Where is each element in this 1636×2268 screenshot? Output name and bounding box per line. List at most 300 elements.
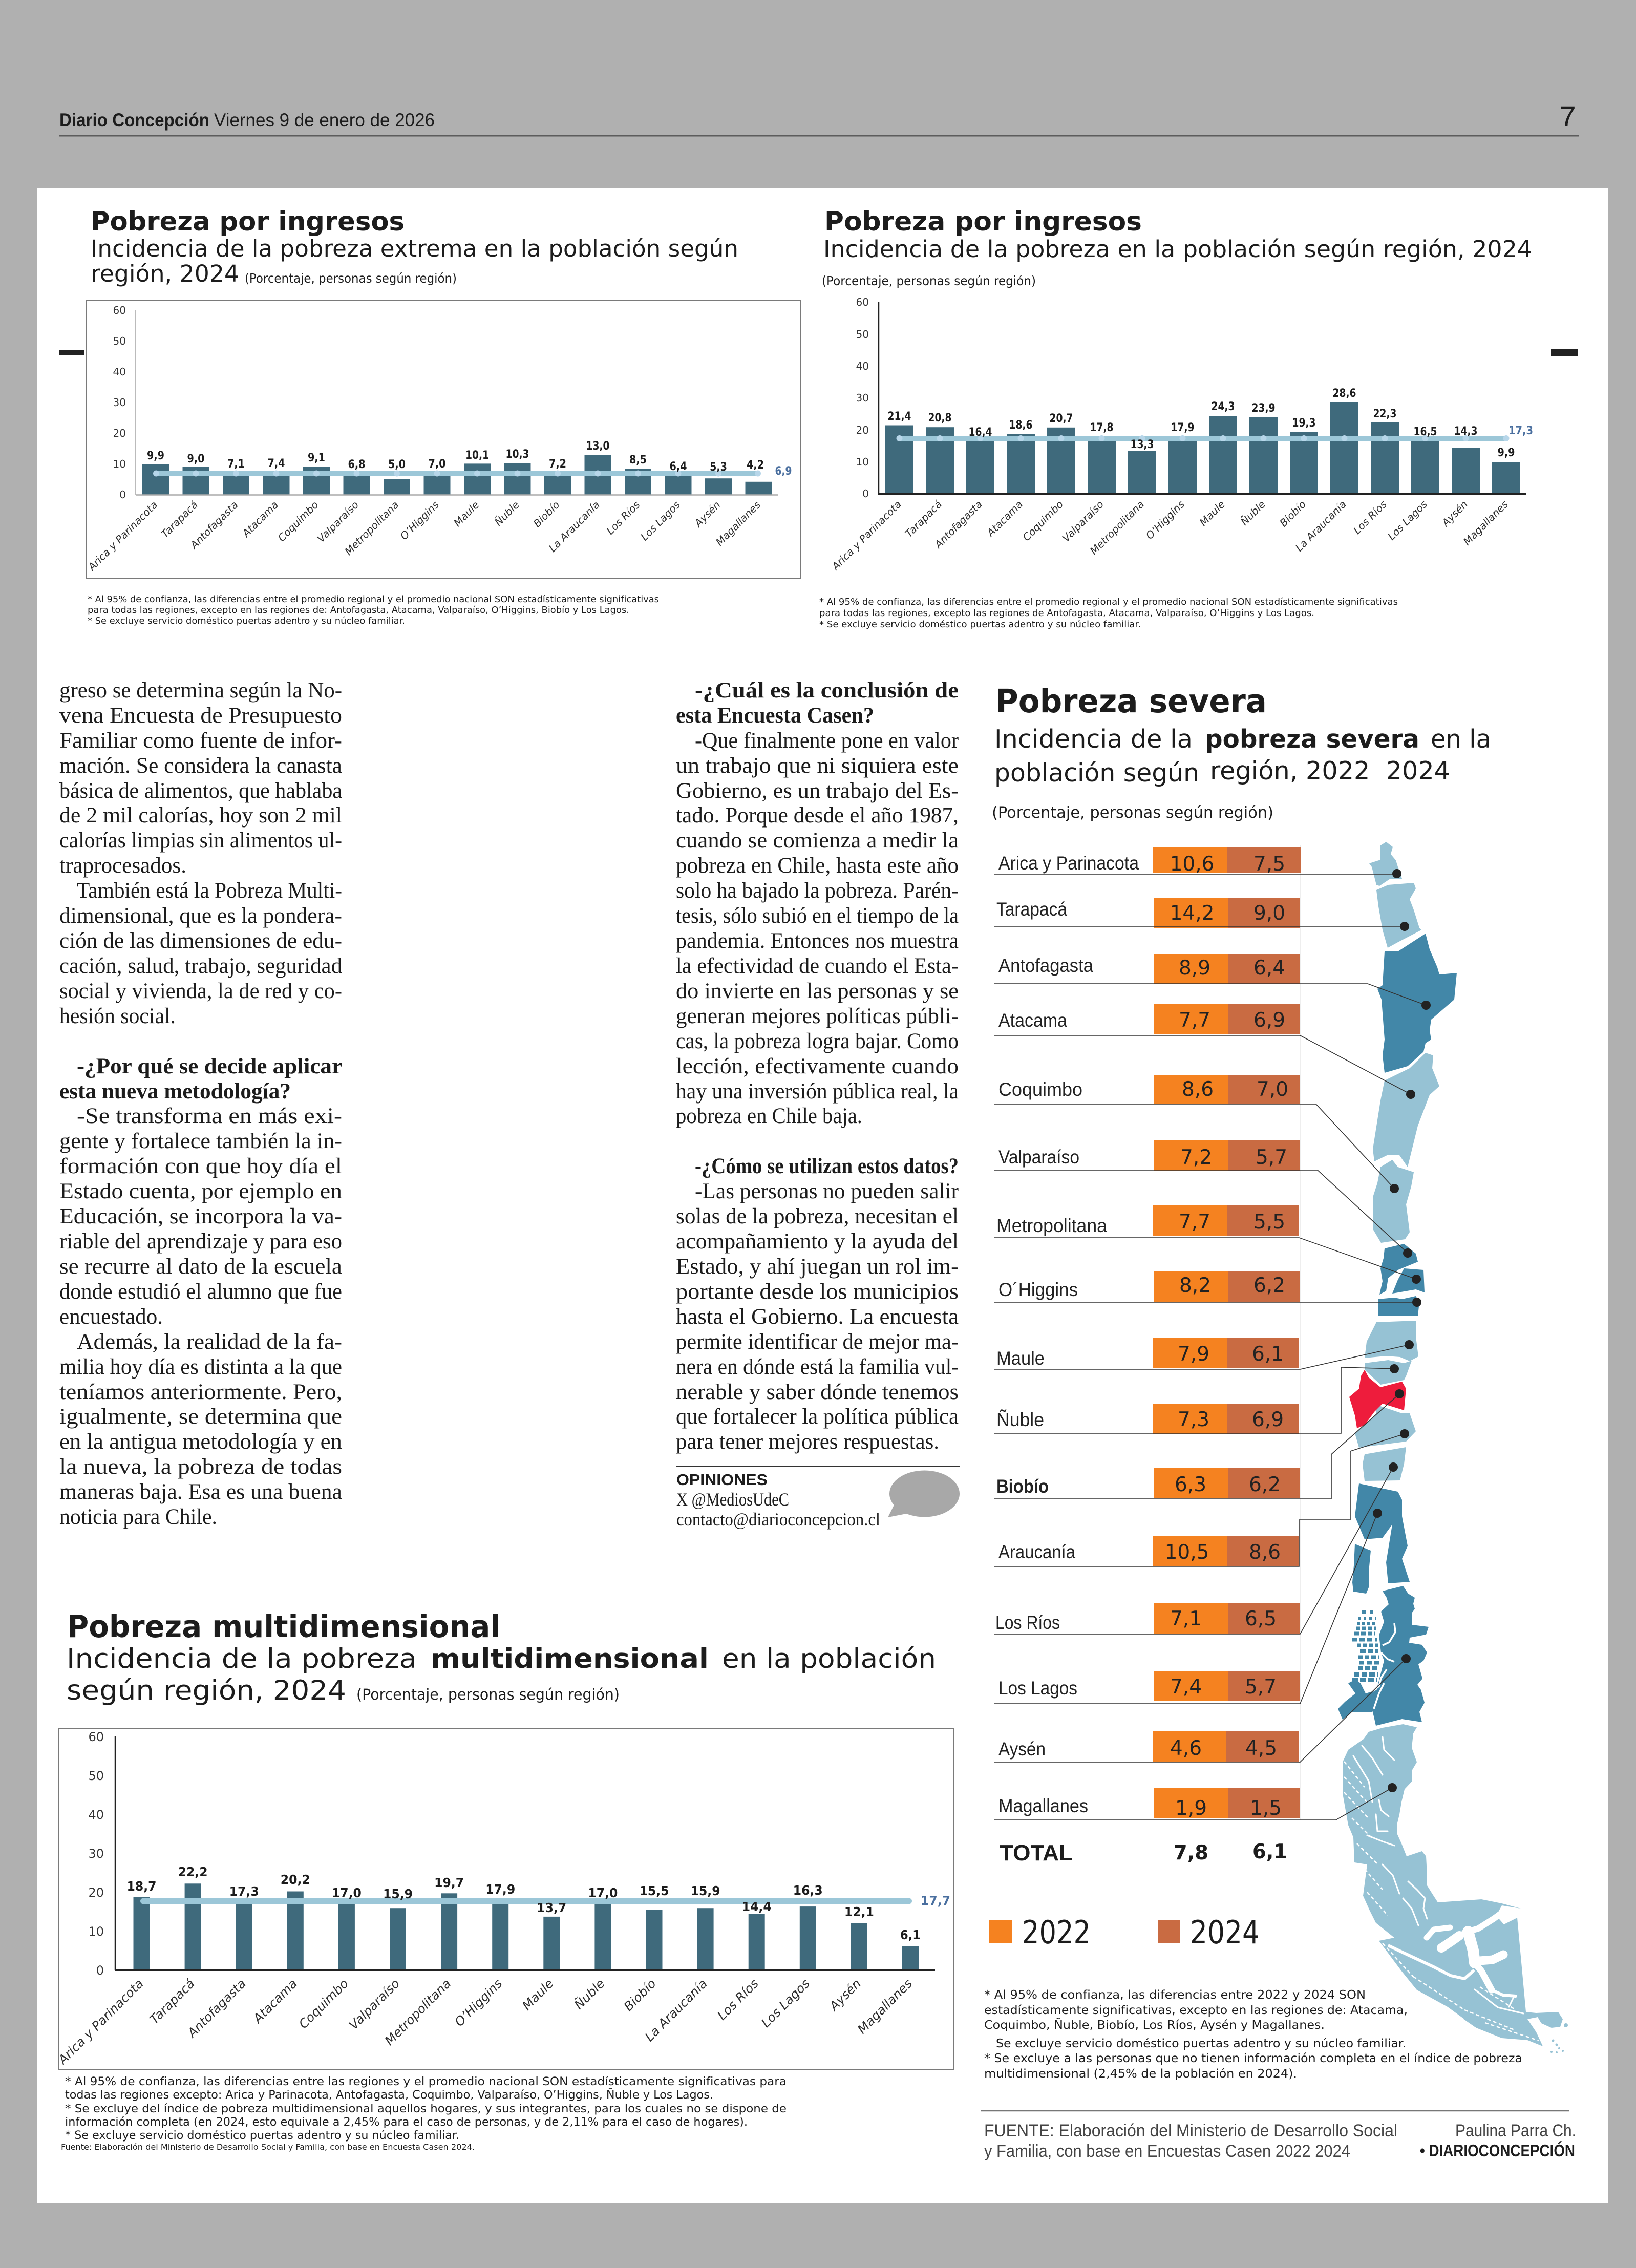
- x axis: [115, 1969, 935, 1971]
- text column left: Educación, se incorpora la va-: [59, 1204, 342, 1228]
- region labels: Ñuble: [1238, 498, 1268, 528]
- connector lines: [994, 874, 1426, 1820]
- region labels: La Araucanía: [1293, 498, 1349, 554]
- text column right: lección, efectivamente cuando: [676, 1054, 959, 1078]
- value labels: 17,3: [229, 1884, 259, 1899]
- row: Antofagasta: Antofagasta: [998, 955, 1093, 976]
- region labels: La Araucanía: [642, 1976, 710, 2044]
- row: Coquimbo: 8,6: [1182, 1078, 1214, 1101]
- footnotes: Se excluye servicio doméstico puertas adentro y su núcleo familiar.: [996, 2037, 1406, 2050]
- national average line: 17,7: [921, 1893, 950, 1908]
- text column left: [59, 679, 342, 1529]
- row: O´Higgins: 6,2: [1253, 1274, 1285, 1297]
- row: Arica y Parinacota: 10,6: [1170, 853, 1214, 876]
- value labels: 10,3: [506, 448, 529, 461]
- text column right: un trabajo que ni siquiera este: [676, 754, 959, 778]
- value labels: 7,0: [428, 458, 445, 471]
- heading: región, 2022 2024: [1210, 756, 1450, 786]
- region labels: Coquimbo: [1020, 498, 1066, 543]
- map: Aysén archipelago: [1352, 1612, 1380, 1680]
- region labels: Ñuble: [571, 1976, 608, 2012]
- value labels: 15,9: [383, 1887, 413, 1901]
- region labels: Tarapacá: [903, 498, 944, 540]
- row: Ñuble: 7,3: [1178, 1408, 1209, 1431]
- region labels: Aysén: [1439, 498, 1470, 529]
- value labels: 28,6: [1332, 387, 1356, 400]
- text column right: -¿Cómo se utilizan estos datos?: [695, 1154, 959, 1178]
- row: total: [1000, 1840, 1287, 1866]
- row: Atacama: [998, 1004, 1300, 1034]
- heading: [822, 206, 1532, 288]
- row: Tarapacá: 9,0: [1253, 902, 1285, 925]
- value labels: 20,2: [281, 1872, 310, 1887]
- footnotes: [984, 1988, 1522, 2081]
- heading: (Porcentaje, personas según región): [356, 1686, 620, 1703]
- row: Biobío: 6,2: [1249, 1473, 1281, 1496]
- value labels: 14,3: [1454, 425, 1478, 438]
- value labels: [147, 440, 764, 474]
- region labels: Atacama: [249, 1976, 300, 2027]
- region labels: O’Higgins: [1143, 498, 1187, 542]
- text column left: se recurre al dato de la escuela: [59, 1255, 342, 1279]
- row: Valparaíso: [998, 1140, 1300, 1171]
- row: Los Lagos: [998, 1671, 1300, 1701]
- map: Magallanes speckled islands: [1344, 1762, 1539, 2041]
- heading: [91, 206, 738, 287]
- region labels: Maule: [1197, 498, 1227, 528]
- text column right: -¿Cuál es la conclusión de: [695, 679, 959, 703]
- footnotes: * Al 95% de confianza, las diferencias entre el promedio regional y el promedio nacional SON estadísticamente significativas: [819, 597, 1398, 607]
- heading: pobreza severa: [1205, 725, 1419, 754]
- text column right: hay una inversión pública real, la: [676, 1079, 959, 1104]
- text column right: nera en dónde está la familia vul-: [676, 1355, 959, 1379]
- row: Arica y Parinacota: Arica y Parinacota: [998, 853, 1139, 874]
- y axis: 60: [856, 296, 869, 308]
- y axis: 40: [856, 360, 869, 372]
- heading: Incidencia de la pobreza en la población según región, 2024: [823, 236, 1532, 263]
- footnotes: * Se excluye servicio doméstico puertas adentro y su núcleo familiar.: [65, 2129, 459, 2142]
- text column left: -¿Por qué se decide aplicar: [77, 1054, 342, 1078]
- footnotes: para todas las regiones, excepto las regiones de Antofagasta, Atacama, Valparaíso, O’Higgins y Los Lagos.: [819, 608, 1314, 619]
- y axis: [113, 304, 136, 501]
- row: Arica y Parinacota: 7,5: [1253, 853, 1285, 876]
- row: Metropolitana: Metropolitana: [996, 1215, 1107, 1236]
- text column right: -Las personas no pueden salir: [695, 1179, 959, 1203]
- region labels: Tarapacá: [159, 499, 200, 540]
- text column right: portante desde los municipios: [676, 1280, 959, 1304]
- row: Los Lagos: Los Lagos: [998, 1678, 1077, 1699]
- value labels: 8,5: [629, 454, 647, 467]
- text column right: acompañamiento y la ayuda del: [676, 1230, 959, 1254]
- heading: Incidencia de la: [994, 725, 1193, 754]
- region labels: Metropolitana: [1088, 498, 1146, 557]
- heading: según región, 2024: [67, 1675, 346, 1706]
- text column right: do invierte en las personas y se: [676, 979, 959, 1003]
- row: Ñuble: Ñuble: [996, 1409, 1044, 1430]
- text column right: hasta el Gobierno. La encuesta: [676, 1305, 959, 1329]
- row: Tarapacá: 14,2: [1170, 902, 1214, 925]
- y axis: 30: [856, 392, 869, 404]
- text column left: básica de alimentos, que hablaba: [59, 779, 342, 803]
- region labels: Valparaíso: [346, 1976, 402, 2032]
- bars: [885, 402, 1520, 494]
- y axis: 10: [113, 458, 126, 470]
- value labels: 15,9: [691, 1883, 720, 1898]
- value labels: 16,3: [793, 1883, 823, 1898]
- panel: extreme poverty chart: [85, 206, 801, 626]
- region labels: Arica y Parinacota: [85, 499, 160, 574]
- text column right: para tener mejores respuestas.: [676, 1430, 939, 1454]
- row: total: 7,8: [1174, 1841, 1208, 1864]
- text column left: calorías limpias sin alimentos ul-: [59, 829, 342, 853]
- region labels: Magallanes: [713, 499, 763, 548]
- text column right: [676, 679, 959, 1454]
- text column left: formación con que hoy día el: [59, 1154, 342, 1178]
- icon: speech bubble: [888, 1471, 960, 1517]
- region labels: Arica y Parinacota: [54, 1976, 146, 2068]
- text column right: pandemia. Entonces nos muestra: [676, 929, 959, 953]
- region labels: [828, 498, 1511, 573]
- footnotes: multidimensional (2,45% de la población en 2024).: [984, 2067, 1297, 2081]
- row: Los Lagos: 5,7: [1245, 1676, 1277, 1699]
- source and credits: y Familia, con base en Encuestas Casen 2022 2024: [984, 2142, 1350, 2161]
- map: Magallanes mainland: [1343, 1724, 1563, 2046]
- heading: (Porcentaje, personas según región): [245, 271, 457, 286]
- row: Los Ríos: Los Ríos: [995, 1612, 1060, 1633]
- row: Coquimbo: [998, 1075, 1300, 1104]
- chart frame: [86, 300, 801, 579]
- row: Valparaíso: 5,7: [1256, 1146, 1287, 1169]
- region labels: Antofagasta: [184, 1976, 249, 2041]
- row: O´Higgins: O´Higgins: [998, 1279, 1078, 1300]
- text column right: nerable y saber dónde tenemos: [676, 1380, 959, 1404]
- heading: en la: [1431, 725, 1491, 754]
- value labels: 9,9: [1497, 447, 1515, 459]
- map: Aysén fjords: [1372, 1623, 1395, 1709]
- opinions box: OPINIONES: [676, 1471, 768, 1489]
- footnotes: * Se excluye del índice de pobreza multidimensional aquellos hogares, y sus integrantes, para los cuales no se dispone de: [65, 2103, 787, 2115]
- footnotes: [61, 2075, 787, 2152]
- row: Magallanes: [998, 1788, 1300, 1820]
- y axis: 60: [113, 304, 126, 316]
- panel: income poverty chart: [819, 206, 1533, 630]
- text column left: social y vivienda, la de red y co-: [59, 979, 342, 1003]
- heading: región, 2024: [91, 260, 239, 287]
- text column left: esta nueva metodología?: [59, 1079, 291, 1104]
- row: Atacama: 7,7: [1179, 1009, 1210, 1032]
- region labels: Magallanes: [855, 1976, 915, 2037]
- value labels: 17,0: [588, 1885, 618, 1900]
- text column right: cas, la pobreza logra bajar. Como: [676, 1029, 959, 1053]
- region labels: Biobío: [531, 499, 562, 529]
- value labels: 19,3: [1292, 417, 1316, 430]
- heading: población según: [994, 758, 1199, 788]
- map: light regions: [1355, 842, 1439, 1481]
- heading: [67, 1609, 936, 1706]
- y axis: 10: [856, 456, 869, 468]
- heading: [992, 683, 1491, 822]
- value labels: 6,1: [900, 1927, 921, 1942]
- row: Los Ríos: [995, 1603, 1300, 1634]
- row: Magallanes: Magallanes: [998, 1795, 1088, 1816]
- value labels: 21,4: [888, 410, 911, 423]
- region labels: Atacama: [239, 499, 281, 540]
- y axis: [88, 1730, 115, 1978]
- value labels: 24,3: [1212, 400, 1235, 413]
- value labels: 12,1: [844, 1904, 874, 1919]
- text column left: maneras baja. Esa es una buena: [59, 1480, 342, 1504]
- footnotes: * Se excluye servicio doméstico puertas adentro y su núcleo familiar.: [88, 616, 405, 626]
- text column left: milia hoy día es distinta a la que: [59, 1355, 342, 1379]
- footnotes: Fuente: Elaboración del Ministerio de Desarrollo Social y Familia, con base en Encuesta Casen 2024.: [61, 2142, 475, 2152]
- footnotes: * Se excluye a las personas que no tienen información completa en el índice de pobreza: [984, 2052, 1522, 2065]
- row: Valparaíso: 7,2: [1180, 1146, 1212, 1169]
- text column left: También está la Pobreza Multi-: [77, 879, 342, 903]
- y axis: 0: [96, 1963, 104, 1978]
- map: Magallanes straits and fjords: [1353, 1737, 1523, 2013]
- y axis: 60: [88, 1730, 104, 1744]
- registration mark left: [59, 350, 84, 355]
- source and credits: [981, 2111, 1576, 2161]
- row: Ñuble: 6,9: [1252, 1408, 1284, 1431]
- row: Valparaíso: Valparaíso: [998, 1147, 1079, 1168]
- row: Aysén: [998, 1731, 1299, 1762]
- row: Biobío: 6,3: [1175, 1473, 1206, 1496]
- value labels: 13,7: [537, 1900, 566, 1915]
- row: total: TOTAL: [1000, 1840, 1073, 1866]
- footnotes: información completa (en 2024, esto equivale a 2,45% para el caso de personas, y de 2,11% para el caso de hogares).: [65, 2116, 748, 2129]
- region labels: Maule: [451, 499, 482, 529]
- region labels: Los Lagos: [758, 1976, 813, 2030]
- row: Maule: Maule: [996, 1348, 1045, 1369]
- panel: severe poverty map and table: [981, 683, 1576, 2161]
- footnotes: [819, 597, 1398, 630]
- value labels: 18,7: [127, 1879, 157, 1894]
- map: southern specks: [1463, 2019, 1568, 2053]
- text column left: dimensional, que es la pondera-: [59, 904, 342, 928]
- footnotes: para todas las regiones, excepto en las regiones de: Antofagasta, Atacama, Valparaíso, O’Higgins, Biobío y Los Lagos.: [88, 605, 629, 616]
- row: Coquimbo: Coquimbo: [998, 1079, 1082, 1100]
- region labels: Ñuble: [492, 499, 522, 528]
- value labels: 7,1: [227, 458, 245, 471]
- table rows: [995, 847, 1301, 1866]
- opinions box: X @MediosUdeC: [676, 1489, 789, 1510]
- row: Tarapacá: Tarapacá: [996, 899, 1067, 920]
- chart frame: [59, 1728, 954, 2070]
- value labels: 4,2: [747, 459, 764, 472]
- row: Los Ríos: 7,1: [1170, 1607, 1202, 1630]
- value labels: 18,6: [1009, 419, 1032, 432]
- region labels: [54, 1976, 915, 2068]
- text column left: gente y fortalece también la in-: [59, 1129, 342, 1153]
- faint table edge: [1300, 845, 1301, 1820]
- text column left: Además, la realidad de la fa-: [77, 1330, 342, 1354]
- row: Metropolitana: 5,5: [1253, 1211, 1285, 1234]
- value labels: [127, 1864, 921, 1942]
- region labels: Los Lagos: [638, 499, 683, 543]
- region labels: Valparaíso: [1060, 498, 1106, 544]
- y axis: 50: [856, 328, 869, 341]
- text column right: solo ha bajado la pobreza. Parén-: [676, 879, 959, 903]
- value labels: 16,5: [1413, 426, 1437, 438]
- value labels: 16,4: [969, 426, 992, 439]
- value labels: 13,0: [586, 440, 609, 453]
- text column left: Estado cuenta, por ejemplo en: [59, 1179, 342, 1203]
- row: Aysén: 4,6: [1170, 1737, 1202, 1760]
- value labels: 14,4: [742, 1899, 772, 1914]
- value labels: 6,4: [670, 460, 687, 473]
- y axis: 40: [88, 1808, 104, 1822]
- text column left: igualmente, se determina que: [59, 1405, 342, 1429]
- national average line: [153, 465, 792, 478]
- text column left: Familiar como fuente de infor-: [59, 729, 342, 753]
- y axis: [856, 296, 879, 500]
- footnotes: estadísticamente significativas, excepto en las regiones de: Atacama,: [984, 2004, 1408, 2017]
- text column left: -Se transforma en más exi-: [77, 1104, 342, 1128]
- region labels: Aysén: [691, 499, 723, 530]
- footnotes: [88, 594, 659, 626]
- value labels: 17,9: [1171, 421, 1194, 434]
- region labels: [85, 499, 763, 574]
- heading: en la población: [722, 1643, 936, 1674]
- region labels: Tarapacá: [146, 1976, 198, 2027]
- row: O´Higgins: 8,2: [1179, 1274, 1211, 1297]
- row: O´Higgins: [998, 1271, 1300, 1302]
- legend: [989, 1914, 1260, 1951]
- value labels: 9,1: [308, 452, 325, 464]
- value labels: 23,9: [1251, 402, 1275, 415]
- region labels: La Araucanía: [546, 499, 602, 555]
- region labels: Metropolitana: [342, 499, 401, 558]
- value labels: 22,2: [178, 1864, 208, 1879]
- x axis: [878, 493, 1526, 495]
- text column left: ción de las dimensiones de edu-: [59, 929, 342, 953]
- bars: [142, 455, 772, 495]
- text column right: esta Encuesta Casen?: [676, 704, 874, 728]
- national average line: 17,3: [1508, 425, 1533, 437]
- page header: [59, 100, 1579, 136]
- heading: (Porcentaje, personas según región): [822, 273, 1036, 288]
- row: Tarapacá: [996, 898, 1300, 928]
- heading: Pobreza multidimensional: [67, 1609, 500, 1645]
- row: Maule: [996, 1338, 1299, 1369]
- row: Maule: 7,9: [1178, 1343, 1209, 1366]
- region labels: Los Ríos: [1351, 498, 1389, 537]
- text column right: tesis, sólo subió en el tiempo de la: [676, 904, 959, 928]
- y axis: 20: [88, 1885, 104, 1900]
- text column right: solas de la pobreza, necesitan el: [676, 1204, 959, 1228]
- value labels: 6,8: [348, 458, 366, 471]
- region labels: Maule: [519, 1976, 557, 2013]
- region labels: O’Higgins: [452, 1976, 505, 2029]
- value labels: 20,8: [928, 412, 951, 425]
- y axis: 40: [113, 366, 126, 378]
- value labels: 9,0: [187, 453, 205, 465]
- text column right: pobreza en Chile baja.: [676, 1104, 862, 1128]
- row: Araucanía: 10,5: [1165, 1541, 1209, 1564]
- row: Biobío: Biobío: [996, 1476, 1049, 1497]
- source and credits: • DIARIOCONCEPCIÓN: [1420, 2141, 1575, 2160]
- heading: (Porcentaje, personas según región): [992, 803, 1273, 822]
- map of Chile by region: [1338, 842, 1568, 2053]
- row: Biobío: [996, 1468, 1300, 1498]
- map: highlighted Biobío region: [1349, 1370, 1406, 1428]
- text column left: mación. Se considera la canasta: [59, 754, 342, 778]
- text column left: donde estudió el alumno que fue: [59, 1280, 342, 1304]
- text column left: teníamos anteriormente. Pero,: [59, 1380, 342, 1404]
- text column right: tado. Porque desde el año 1987,: [676, 803, 959, 828]
- row: Atacama: 6,9: [1253, 1009, 1285, 1032]
- text column left: de 2 mil calorías, hoy son 2 mil: [59, 803, 342, 828]
- region labels: Biobío: [1277, 498, 1308, 529]
- row: Antofagasta: 8,9: [1179, 957, 1210, 980]
- text column right: Gobierno, es un trabajo del Es-: [676, 779, 959, 803]
- footnotes: * Se excluye servicio doméstico puertas adentro y su núcleo familiar.: [819, 619, 1141, 630]
- row: Araucanía: Araucanía: [998, 1541, 1075, 1562]
- source and credits: FUENTE: Elaboración del Ministerio de Desarrollo Social: [984, 2121, 1397, 2140]
- y axis: 0: [862, 487, 869, 500]
- legend: 2022: [1022, 1914, 1091, 1951]
- bars: [133, 1883, 919, 1970]
- heading: Pobreza por ingresos: [824, 206, 1142, 237]
- page header: Diario Concepción: [59, 110, 209, 131]
- text column right: cuando se comienza a medir la: [676, 829, 959, 853]
- text column left: en la antigua metodología y en: [59, 1430, 342, 1454]
- row: Maule: 6,1: [1252, 1343, 1284, 1366]
- value labels: 17,8: [1090, 421, 1113, 434]
- region labels: Los Ríos: [604, 499, 643, 537]
- region labels: Aysén: [825, 1976, 864, 2014]
- value labels: 17,9: [485, 1882, 515, 1897]
- value labels: 7,4: [267, 457, 285, 470]
- value labels: 10,1: [465, 449, 489, 462]
- y axis: 20: [856, 424, 869, 436]
- region labels: Los Lagos: [1385, 498, 1430, 542]
- value labels: 17,0: [332, 1885, 362, 1900]
- region labels: Arica y Parinacota: [828, 498, 904, 573]
- y axis: 50: [88, 1769, 104, 1783]
- text column left: traprocesados.: [59, 854, 186, 878]
- value labels: 20,7: [1050, 412, 1073, 425]
- text column right: permite identificar de mejor ma-: [676, 1330, 959, 1354]
- text column left: vena Encuesta de Presupuesto: [59, 704, 342, 728]
- text column left: encuestado.: [59, 1305, 163, 1329]
- y axis: 0: [119, 489, 126, 501]
- region labels: Antofagasta: [931, 498, 985, 552]
- heading: Incidencia de la pobreza extrema en la población según: [91, 235, 738, 262]
- text column left: cación, salud, trabajo, seguridad: [59, 954, 342, 978]
- footnotes: todas las regiones excepto: Arica y Parinacota, Antofagasta, Coquimbo, Valparaíso, O’Higgins, Ñuble y Los Lagos.: [65, 2088, 713, 2102]
- value labels: 7,2: [549, 458, 566, 471]
- text column right: la efectividad de cuando el Esta-: [676, 954, 959, 978]
- region labels: Magallanes: [1461, 498, 1511, 548]
- value labels: 19,7: [434, 1875, 464, 1890]
- region labels: Coquimbo: [296, 1976, 351, 2031]
- row: Atacama: Atacama: [998, 1010, 1067, 1031]
- row: Metropolitana: [996, 1205, 1299, 1236]
- heading: Pobreza por ingresos: [91, 206, 405, 237]
- row: Araucanía: [998, 1536, 1299, 1566]
- region labels: O’Higgins: [398, 499, 441, 542]
- text column left: hesión social.: [59, 1004, 176, 1028]
- row: Coquimbo: 7,0: [1257, 1078, 1288, 1101]
- heading: multidimensional: [431, 1643, 709, 1674]
- text column left: greso se determina según la No-: [59, 679, 342, 703]
- row: Los Ríos: 6,5: [1245, 1607, 1277, 1630]
- opinions box: [676, 1466, 960, 1530]
- national average line: [896, 425, 1533, 441]
- value labels: 13,3: [1131, 438, 1154, 451]
